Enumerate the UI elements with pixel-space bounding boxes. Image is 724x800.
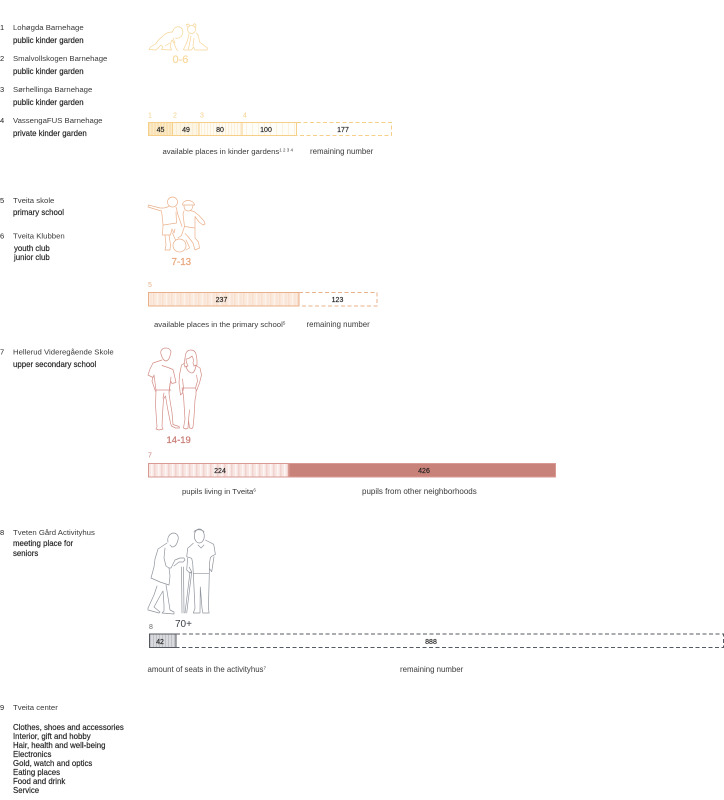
shop categories: Service (13, 786, 40, 795)
item 7: Hellerud Videregående Skole (0, 348, 114, 369)
bar number label: 8 (149, 624, 153, 631)
values: 224 (214, 468, 226, 475)
captions: 1 2 3 4 (279, 148, 294, 152)
item 8: Tveten Gård Activityhus: 8 (0, 528, 4, 537)
bar number labels: 4 (243, 112, 247, 120)
values: 42 (156, 639, 164, 646)
item 2: Smalvollskogen Barnehage (0, 54, 107, 76)
item 8: Tveten Gård Activityhus: Tveten Gård Activityhus (13, 528, 95, 537)
captions: remaining number (306, 320, 370, 329)
captions: remaining number (310, 147, 374, 156)
item 1: Lohøgda Barnehage: 1 (0, 23, 4, 32)
shop categories (13, 723, 124, 795)
item 7: Hellerud Videregående Skole: upper secondary school (13, 360, 97, 369)
list: activity house (0, 528, 95, 558)
item 4: VassengaFUS Barnehage (0, 116, 102, 138)
item 6: Tveita Klubben: 6 (0, 232, 4, 240)
list: upper secondary school (0, 348, 114, 369)
item 8: Tveten Gård Activityhus: seniors (13, 549, 38, 558)
item 5: Tveita skole: Tveita skole (13, 196, 54, 205)
bar number labels: 2 (173, 112, 177, 120)
item 9 heading: Tveita center: Tveita center (13, 703, 58, 712)
captions: available places in the primary school (154, 320, 283, 329)
shop categories: Food and drink (13, 777, 65, 786)
item 6: Tveita Klubben: junior club (13, 253, 50, 262)
available places segment (148, 292, 299, 306)
remaining dashed segment (176, 634, 724, 648)
item 1: Lohøgda Barnehage (0, 23, 84, 45)
item 6: Tveita Klubben: youth club (14, 244, 50, 253)
seats segment (150, 634, 176, 648)
shop categories: Clothes, shoes and accessories (13, 723, 124, 732)
item 3: Sørhellinga Barnehage: public kinder garden (13, 98, 84, 107)
shop categories: Eating places (13, 768, 60, 777)
item 3: Sørhellinga Barnehage (0, 85, 92, 107)
item 7: Hellerud Videregående Skole: Hellerud Videregående Skole (13, 348, 114, 356)
bar number labels (148, 112, 247, 120)
item 2: Smalvollskogen Barnehage: 2 (0, 54, 4, 63)
captions: pupils from other neighborhoods (362, 487, 477, 496)
values: 237 (216, 297, 227, 304)
captions: available places in kinder gardens (162, 147, 279, 156)
chart: primary school places (148, 282, 377, 329)
values: 177 (337, 127, 349, 134)
captions (162, 147, 374, 156)
item 9 heading: Tveita center: 9 (0, 703, 4, 712)
icon: two children playing football (148, 197, 205, 252)
segments (148, 122, 172, 136)
age label 14-19: 14-19 (166, 435, 191, 446)
list: kindergartens (0, 23, 107, 138)
captions: 6 (253, 488, 256, 492)
values: 426 (418, 468, 430, 475)
age label 0-6: 0-6 (172, 54, 188, 66)
captions (154, 320, 370, 329)
shop categories: Electronics (13, 750, 51, 759)
bar number label: 7 (148, 452, 152, 460)
item 1: Lohøgda Barnehage: public kinder garden (13, 36, 84, 45)
item 4: VassengaFUS Barnehage: private kinder garden (13, 129, 87, 138)
list: Tveita center (0, 703, 124, 795)
remaining dashed segment (299, 292, 377, 306)
item 5: Tveita skole (0, 196, 64, 217)
chart: kindergarten places (148, 112, 392, 156)
list: primary school and club (0, 196, 65, 262)
remaining dashed segment (297, 122, 392, 136)
values: 123 (332, 297, 343, 304)
values: 49 (182, 127, 190, 134)
item 1: Lohøgda Barnehage: Lohøgda Barnehage (13, 23, 84, 32)
item 8: Tveten Gård Activityhus (0, 528, 95, 558)
bar number labels: 1 (148, 112, 152, 120)
item 8: Tveten Gård Activityhus: meeting place for (13, 539, 74, 548)
values (156, 639, 437, 646)
item 4: VassengaFUS Barnehage: 4 (0, 116, 4, 125)
item 4: VassengaFUS Barnehage: VassengaFUS Barnehage (13, 116, 102, 125)
item 2: Smalvollskogen Barnehage: public kinder garden (13, 67, 84, 76)
values: 80 (216, 127, 224, 134)
icon: crawling baby and seated toddler (149, 24, 208, 50)
captions: amount of seats in the activityhus (148, 665, 263, 674)
item 3: Sørhellinga Barnehage: Sørhellinga Barnehage (13, 85, 92, 94)
shop categories: Hair, health and well-being (13, 741, 105, 750)
item 5: Tveita skole: primary school (13, 208, 64, 217)
captions (148, 665, 464, 674)
item 7: Hellerud Videregående Skole: 7 (0, 348, 4, 356)
values: 888 (425, 639, 437, 646)
values: 45 (157, 127, 164, 134)
bar number labels: 3 (200, 112, 204, 120)
values (214, 468, 430, 475)
values (216, 297, 343, 304)
captions: 7 (263, 666, 266, 670)
item 5: Tveita skole: 5 (0, 196, 4, 205)
item 2: Smalvollskogen Barnehage: Smalvollskogen Barnehage (13, 54, 107, 63)
values: 100 (260, 127, 272, 134)
pupils from other neighborhoods segment (289, 464, 556, 477)
captions (182, 487, 477, 496)
pupils living in Tveita segment (148, 464, 288, 477)
age label 70+: 70+ (175, 619, 192, 630)
captions: 5 (283, 320, 286, 326)
item 3: Sørhellinga Barnehage: 3 (0, 85, 4, 94)
shop categories: Interior, gift and hobby (13, 732, 91, 741)
item 6: Tveita Klubben: Tveita Klubben (13, 232, 65, 240)
chart: upper secondary pupils (148, 452, 556, 496)
captions: remaining number (400, 665, 464, 674)
icon: two teenagers standing (148, 348, 202, 430)
icon: two seniors with walking sticks (148, 529, 215, 614)
chart: activity house seats (148, 624, 724, 674)
values (157, 127, 349, 134)
bar number label: 5 (148, 282, 152, 289)
shop categories: Gold, watch and optics (13, 759, 92, 768)
captions: pupils living in Tveita (182, 487, 253, 496)
age label 7-13: 7-13 (172, 257, 192, 268)
item 6: Tveita Klubben (0, 232, 65, 262)
